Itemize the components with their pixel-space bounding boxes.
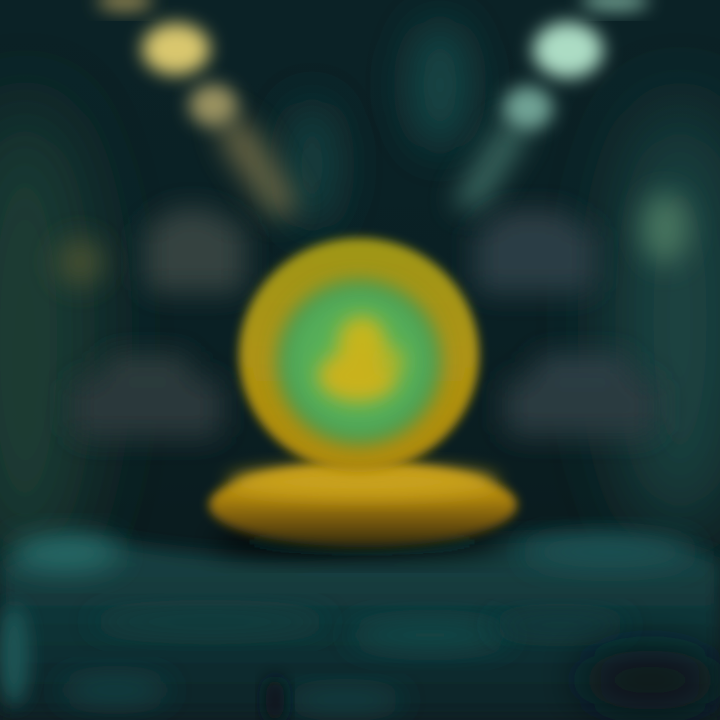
coin base: gold disc bbox=[209, 463, 517, 556]
coin: gold ring with green face bbox=[239, 238, 479, 472]
light beam: left yellow bbox=[56, 0, 298, 286]
light beam: right mint bbox=[452, 0, 689, 264]
icon: yellow coin emblem bbox=[318, 316, 404, 402]
panel: upper left bbox=[145, 210, 245, 292]
ground: teal rocky terrain bbox=[0, 535, 720, 720]
panel: upper right bbox=[475, 212, 595, 293]
panel: lower right bbox=[505, 355, 657, 436]
panel: lower left bbox=[72, 355, 222, 438]
